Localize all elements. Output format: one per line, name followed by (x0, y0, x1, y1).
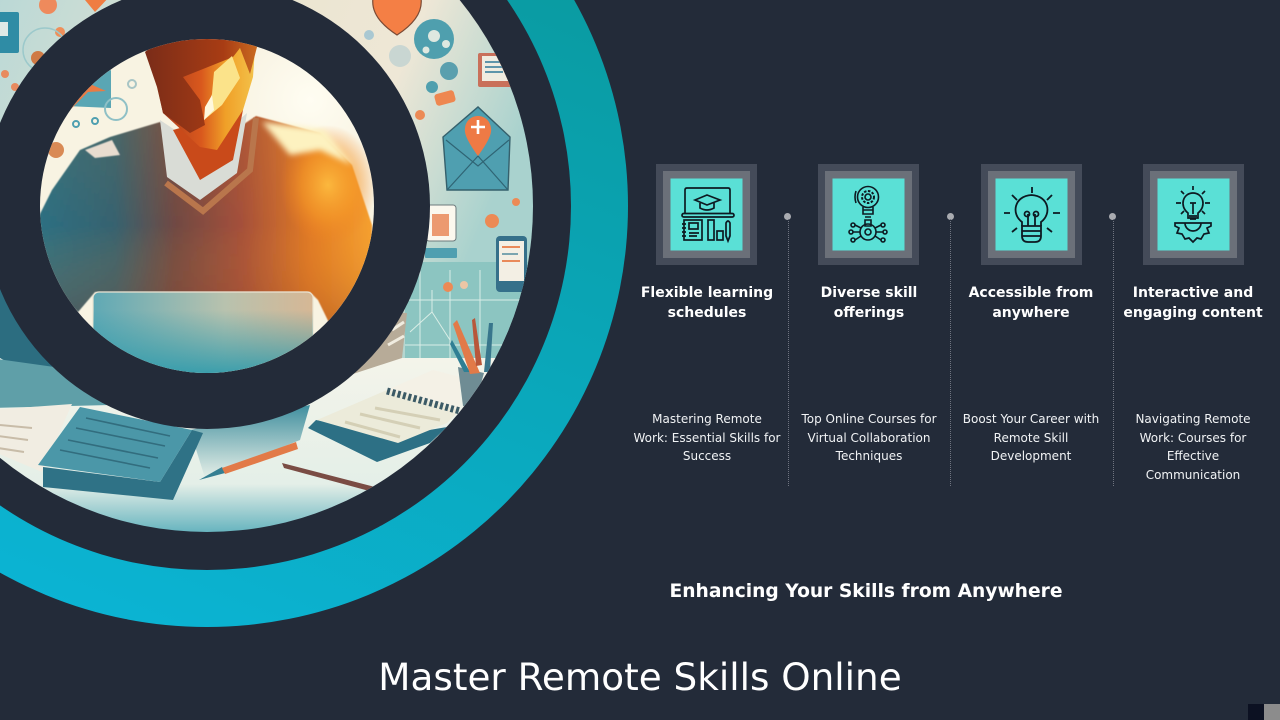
dark inner ring (0, 0, 430, 429)
heading: engaging content (1123, 305, 1263, 321)
description: Development (991, 449, 1071, 463)
background glow (266, 50, 362, 144)
top-left icons (0, 0, 112, 91)
pencil, orange (199, 442, 298, 480)
inner background (40, 39, 374, 373)
icon: chat card (425, 205, 457, 258)
heading: Accessible from (969, 285, 1093, 301)
hair (145, 37, 257, 133)
heading (821, 285, 917, 321)
icon: laptop with graduation cap (656, 164, 757, 265)
icon: bulb over gear (1143, 164, 1244, 265)
sweater (30, 116, 372, 335)
corner mark: grey square (1264, 704, 1280, 720)
heading: offerings (834, 305, 904, 321)
sweater highlight (262, 122, 352, 165)
heading (1123, 285, 1263, 321)
description: Communication (1146, 468, 1240, 482)
icon: small cogs (364, 30, 458, 106)
man's arm, left (0, 289, 53, 367)
circular illustration with concentric rings (0, 0, 628, 627)
circuit grid (405, 262, 535, 359)
neck (173, 110, 243, 180)
shirt collar (160, 113, 247, 200)
sweater neckline (166, 118, 256, 211)
panel: feature 3 (963, 164, 1099, 463)
man's sleeve, right (340, 310, 407, 385)
icon: phone card (496, 236, 527, 292)
face light (204, 56, 240, 120)
description: Navigating Remote (1135, 412, 1251, 426)
timeline line 2 (950, 219, 951, 486)
icon: document (478, 53, 514, 87)
description: Top Online Courses for (801, 412, 937, 426)
icon: heart (373, 0, 421, 35)
subheading: Enhancing Your Skills from Anywhere (670, 581, 1062, 602)
icon: envelope with pin (443, 107, 510, 190)
description (634, 412, 780, 463)
icon: bulb with gear and network (818, 164, 919, 265)
heading (641, 285, 773, 321)
description: Remote Skill (994, 431, 1068, 445)
heading (968, 285, 1093, 321)
heading: Interactive and (1133, 285, 1253, 301)
icon: teal gear (414, 19, 454, 59)
description: Success (683, 449, 731, 463)
laptop (93, 292, 313, 382)
description: Mastering Remote (652, 412, 762, 426)
timeline dot 3 (1109, 212, 1116, 220)
description (963, 412, 1099, 463)
icon: light bulb (981, 164, 1082, 265)
spiral notebook (308, 388, 460, 462)
description: Boost Your Career with (963, 412, 1099, 426)
heading: schedules (668, 305, 746, 321)
panel: feature 2 (801, 164, 937, 463)
description (1135, 412, 1251, 482)
panel: feature 4 (1123, 164, 1263, 482)
pencil, brown (282, 463, 375, 492)
sweater glow (288, 127, 374, 224)
timeline line 1 (788, 219, 789, 486)
description: Virtual Collaboration (808, 431, 930, 445)
title: Master Remote Skills Online (378, 655, 902, 699)
description: Work: Essential Skills for (634, 431, 780, 445)
icon: orange nodes (415, 110, 520, 292)
heading: anywhere (992, 305, 1070, 321)
panel: feature 1 (634, 164, 780, 463)
shadow under laptop (190, 405, 310, 478)
description: Techniques (836, 449, 902, 463)
timeline line 3 (1112, 219, 1114, 486)
shoulder highlight (85, 140, 120, 158)
desk shadow, left (0, 358, 110, 408)
pencil cup (450, 318, 493, 408)
corner mark: dark square (1248, 704, 1264, 720)
face (157, 48, 255, 150)
open book (0, 404, 203, 500)
cheek highlight (204, 95, 214, 120)
timeline dot 2 (946, 212, 954, 220)
description (801, 412, 937, 463)
desk surface (0, 358, 496, 532)
description: Effective (1167, 449, 1219, 463)
description: Work: Courses for (1140, 431, 1246, 445)
inner left icons (48, 70, 136, 158)
wall background (0, 0, 540, 360)
timeline dot 1 (784, 212, 791, 220)
heading: Flexible learning (641, 285, 773, 301)
inner picture disc: man at laptop (40, 39, 374, 373)
heading: Diverse skill (821, 285, 917, 301)
outer picture disc: desk and icons (0, 0, 540, 538)
teal outer ring (0, 0, 628, 627)
dark gap ring (0, 0, 571, 570)
